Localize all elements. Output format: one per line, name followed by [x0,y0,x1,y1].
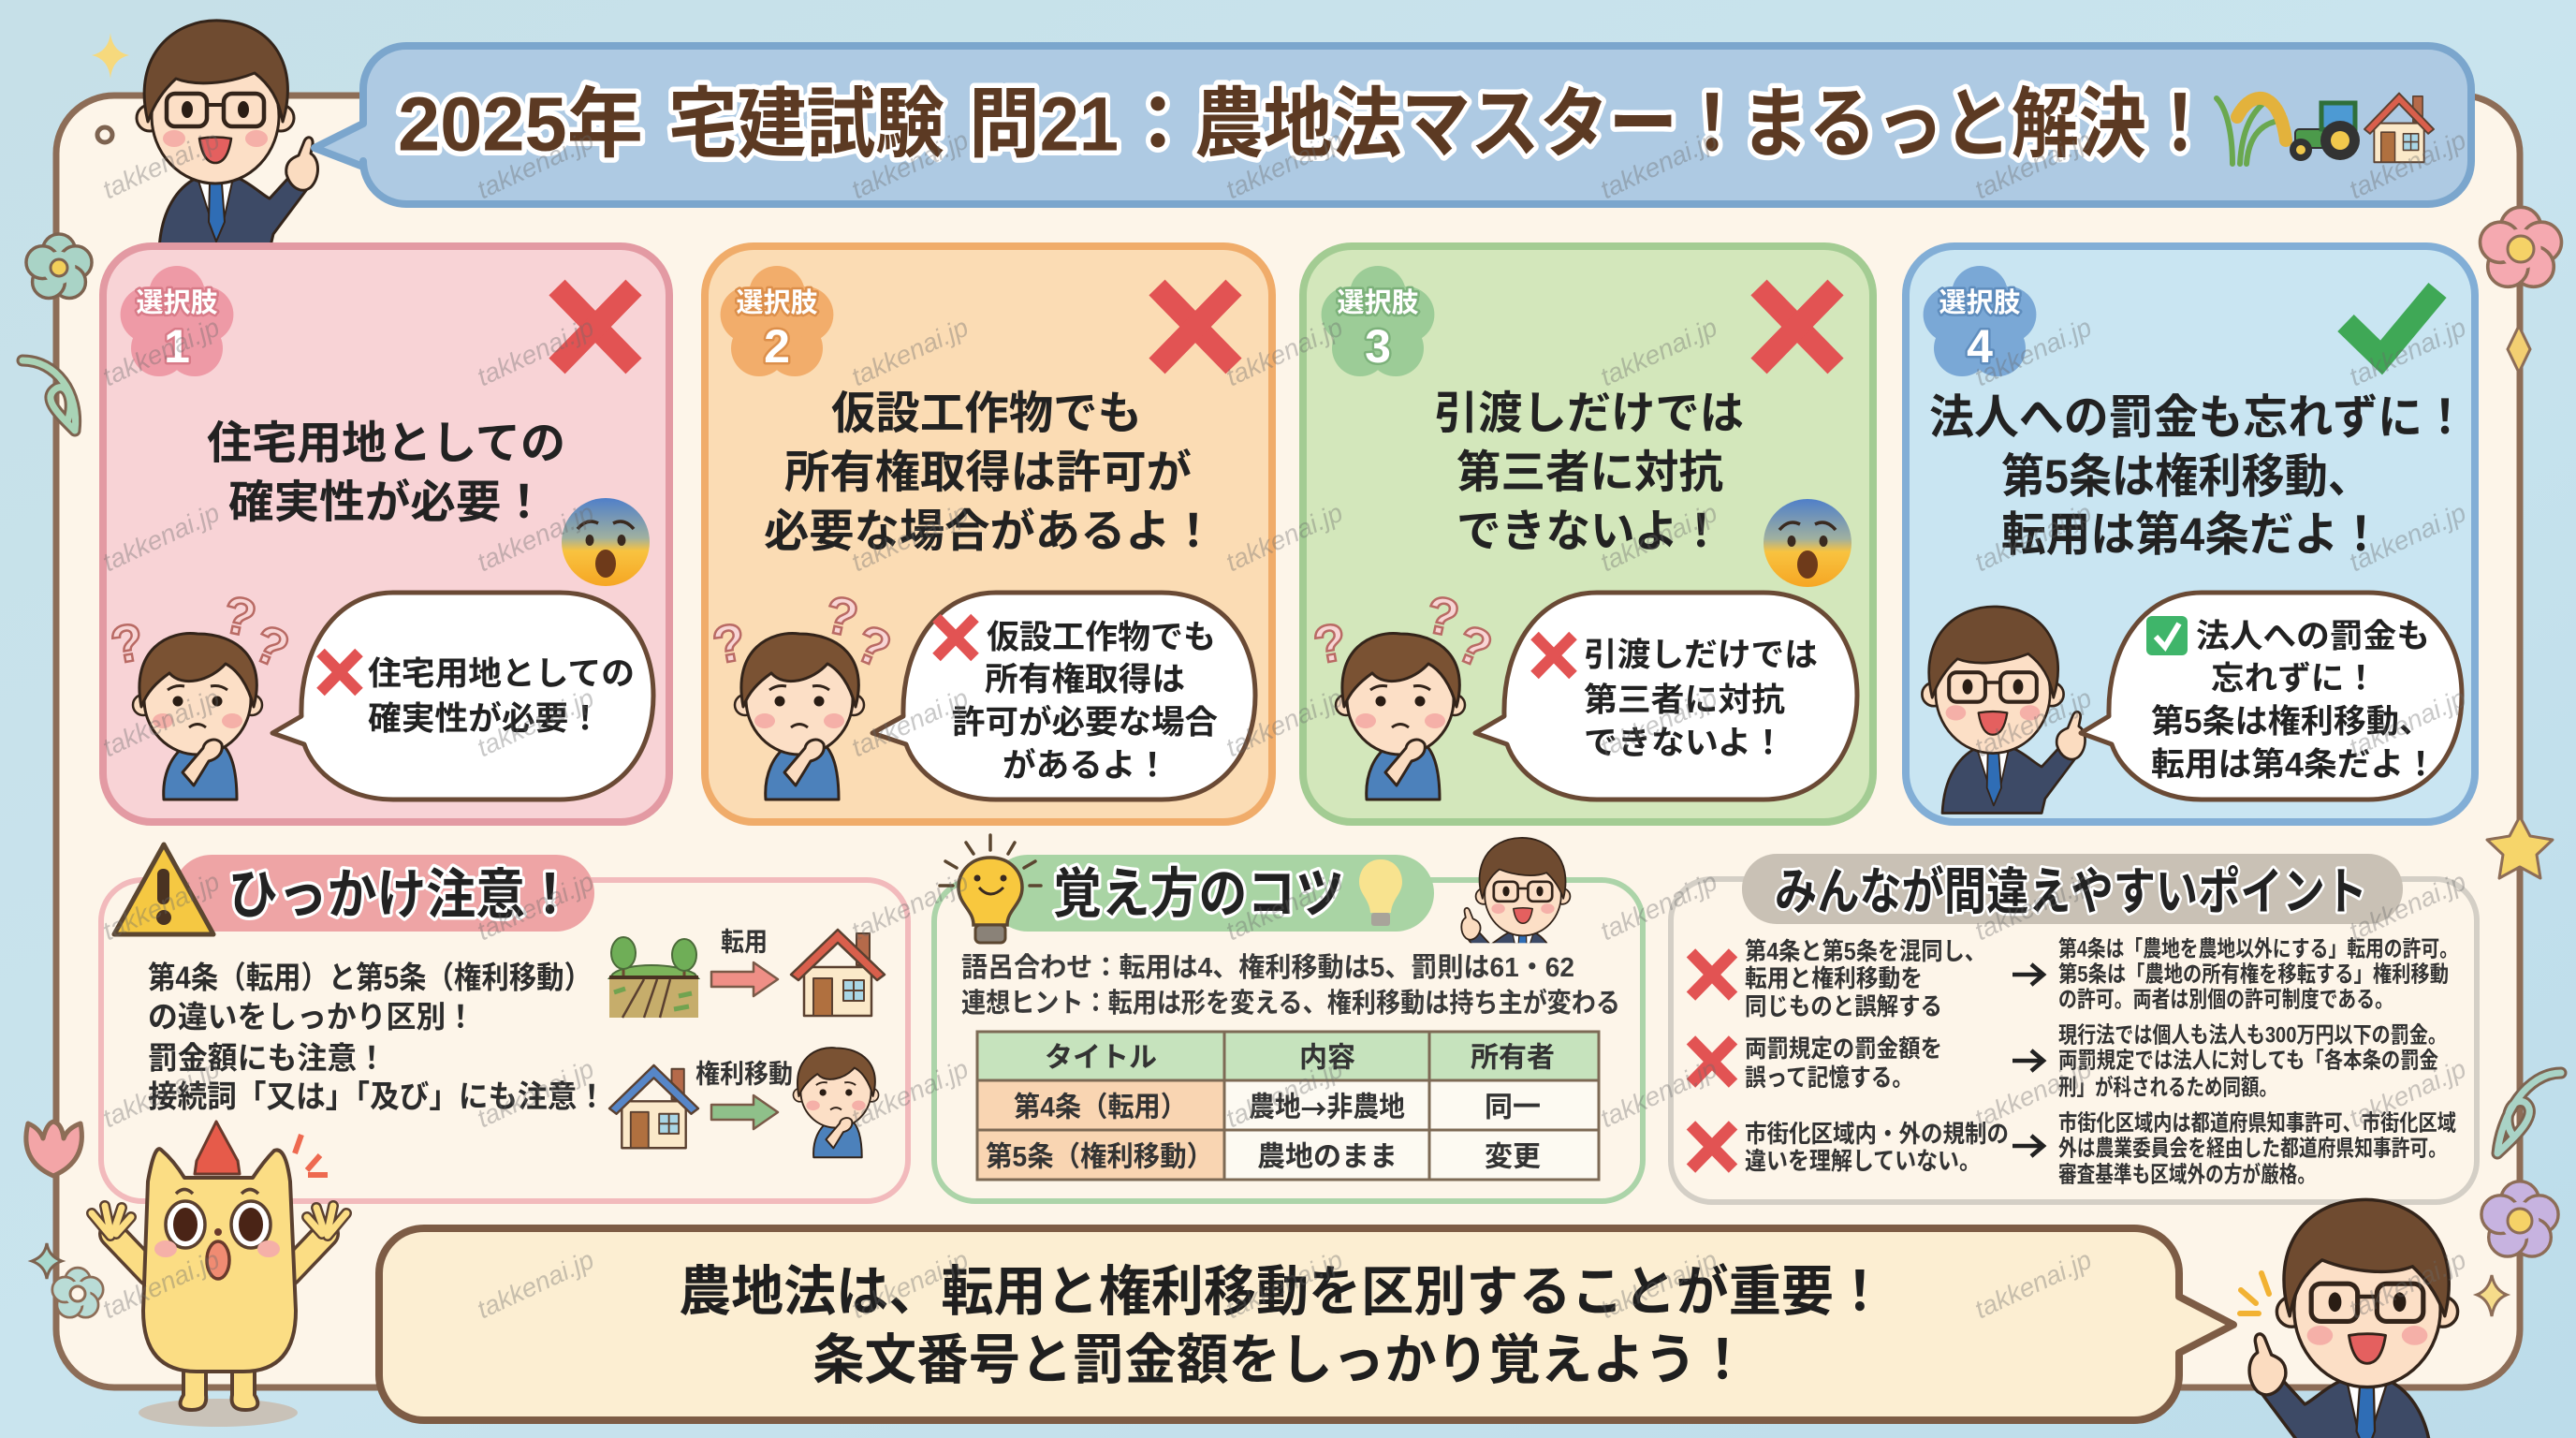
body text: 罰金額にも注意！ [148,1041,387,1075]
watermarks: takkenai.jp [1222,125,1347,204]
badge 2 [721,266,833,376]
comparison table: 農地→非農地 [1249,1087,1405,1128]
watermarks: takkenai.jp [473,125,598,204]
badge 2: 選択肢 [736,287,818,318]
mistake row 1 [1690,936,2458,1020]
character: confused boy [1310,584,1500,800]
watermarks: takkenai.jp [2345,125,2470,204]
title text: 宅建試験 [668,82,944,167]
watermarks [98,125,2470,1324]
summary text: 農地法は、転用と権利移動を区別することが重要！ [679,1262,1886,1322]
comparison table: 第4条（転用） [1014,1092,1187,1123]
icon: scared face [1764,499,1852,587]
badge 3: 選択肢 [1337,287,1419,318]
mistake row 1: 転用と権利移動を [1745,964,1923,992]
watermarks: takkenai.jp [2345,498,2470,577]
label: rights transfer: 権利移動 [695,1060,793,1088]
character: confused boy: ? [107,611,148,675]
main text: 住宅用地としての [207,419,565,468]
main text [1929,391,2467,561]
speech bubble: できないよ！ [1584,725,1785,762]
watermarks: takkenai.jp [2345,313,2470,391]
main text [207,419,565,528]
badge 3: 3 [1365,320,1391,373]
heading pill [173,855,594,932]
icon: scared face [562,498,650,586]
icon: warning triangle [114,844,213,934]
panel: choice 2 [705,246,1272,822]
watermarks: takkenai.jp [1970,125,2096,204]
comparison table: 変更 [1485,1142,1541,1172]
watermarks: takkenai.jp [2345,1245,2470,1324]
heading text: ひっかけ注意！ [228,865,575,925]
speech bubble: 転用は第4条だよ！ [2151,747,2437,783]
icon: bulb [1359,859,1402,926]
speech bubble [1475,593,1857,800]
heading text: 覚え方のコツ [1053,863,1344,925]
watermarks: takkenai.jp [1222,1054,1347,1133]
watermarks: takkenai.jp [473,313,598,391]
panel: trap warning [101,844,908,1201]
character: confused boy: ? [1421,584,1464,648]
mistake row 2: 両罰規定では法人に対しても「各本条の罰金 [2058,1047,2438,1073]
title text: ： [1120,82,1195,167]
icon: house [2364,94,2434,162]
arrow: green [711,1095,778,1129]
character: teacher [1460,837,1571,944]
character: confused boy: ? [709,611,750,675]
watermarks: takkenai.jp [847,1054,973,1133]
character: teacher [1922,607,2086,813]
comparison table: 農地のまま [1257,1142,1398,1172]
comparison table [977,1032,1599,1180]
watermarks: takkenai.jp [1970,498,2096,577]
watermarks: takkenai.jp [1970,313,2096,391]
mistake row 3: 市街化区域内は都道府県知事許可、市街化区域 [2058,1110,2456,1137]
badge 4: 4 [1967,320,1993,373]
watermarks: takkenai.jp [473,498,598,577]
mistake row 1: 同じものと誤解する [1745,992,1942,1020]
heading text: みんなが間違えやすいポイント [1775,864,2367,920]
mistake row 1: 第4条は「農地を農地以外にする」転用の許可。 [2058,936,2458,962]
watermarks: takkenai.jp [2345,683,2470,762]
icon: green check box [2146,616,2188,655]
panel: choice 1 [103,246,669,822]
main text: 仮設工作物でも [831,389,1142,438]
speech bubble: 第三者に対抗 [1584,682,1785,719]
title text: 農地法マスター！ [1194,82,1747,167]
summary text [679,1262,1886,1391]
arrow: red [711,962,778,996]
label: conversion: 転用 [721,927,768,957]
mistake row 2: 刑」が科されるため同額。 [2058,1075,2277,1101]
watermarks: takkenai.jp [98,867,224,946]
watermarks: takkenai.jp [1596,125,1721,204]
speech bubble: 第5条は権利移動、 [2151,704,2432,740]
speech bubble: 所有権取得は [985,661,1185,698]
watermarks: takkenai.jp [1596,683,1721,762]
watermarks: takkenai.jp [473,683,598,762]
speech bubble: 法人への罰金も [2196,618,2430,655]
watermarks: takkenai.jp [1596,313,1721,391]
character: confused boy: ? [245,612,298,680]
body text: 語呂合わせ：転用は4、権利移動は5、罰則は61・62 [961,952,1574,983]
badge 4: 選択肢 [1939,287,2021,318]
watermarks: takkenai.jp [473,867,598,946]
body text [148,961,607,1114]
watermarks: takkenai.jp [847,313,973,391]
watermarks: takkenai.jp [1222,683,1347,762]
watermarks: takkenai.jp [473,1054,598,1133]
mistake row 2: 誤って記憶する。 [1745,1064,1913,1092]
badge 1: 1 [164,320,190,373]
main text: 法人への罰金も忘れずに！ [1929,391,2467,444]
mistake row 3 [1690,1110,2456,1187]
watermarks: takkenai.jp [1970,867,2096,946]
title banner [315,46,2471,204]
watermarks: takkenai.jp [1596,498,1721,577]
badge 1: 選択肢 [136,287,218,318]
watermarks: takkenai.jp [473,1245,598,1324]
cross mark [557,287,634,366]
character: confused boy: ? [218,584,261,648]
panel: memory tips [934,835,1643,1201]
badge 3 [1322,266,1434,376]
speech bubble: 引渡しだけでは [1584,637,1818,674]
summary speech panel [379,1228,2233,1420]
main text: 引渡しだけでは [1434,389,1744,438]
title text: まるっと解決！ [1741,82,2214,167]
comparison table: タイトル [1045,1043,1157,1073]
cross mark [1759,287,1836,366]
character: teacher top left [137,21,318,250]
speech bubble [872,593,1255,800]
main text: 所有権取得は許可が [784,448,1192,498]
speech bubble: 許可が必要な場合 [952,704,1218,741]
watermarks: takkenai.jp [1222,313,1347,391]
speech bubble [2081,593,2462,800]
main text [1434,389,1744,556]
mistake row 2: 現行法では個人も法人も300万円以下の罰金。 [2058,1022,2447,1049]
icon: tractor [2290,103,2360,161]
panel: common mistakes [1671,854,2477,1202]
panel: choice 3 [1303,246,1873,822]
watermarks: takkenai.jp [847,867,973,946]
mistake row 3: 外は農業委員会を経由した都道府県知事許可。 [2058,1137,2447,1161]
title text: 問21 [969,82,1119,167]
icon: rice plant [2217,98,2286,164]
emphasis lines [2240,1273,2269,1313]
speech bubble: 忘れずに！ [2211,661,2378,697]
character: confused boy: ? [847,612,900,680]
character: confused boy: ? [1448,612,1500,680]
comparison table: 第5条（権利移動） [986,1142,1213,1172]
watermarks: takkenai.jp [2345,867,2470,946]
speech bubble: 仮設工作物でも [987,620,1216,655]
mistake row 2 [1690,1022,2447,1101]
character: teacher bottom right [2249,1199,2458,1438]
heading pill [1742,854,2403,924]
mistake row 3: 違いを理解していない。 [1745,1147,1981,1175]
watermarks: takkenai.jp [98,1245,224,1324]
watermarks: takkenai.jp [98,313,224,391]
watermarks: takkenai.jp [847,125,973,204]
watermarks: takkenai.jp [847,498,973,577]
watermarks: takkenai.jp [847,683,973,762]
watermarks: takkenai.jp [1970,683,2096,762]
main text: できないよ！ [1456,507,1723,556]
watermarks: takkenai.jp [98,683,224,762]
watermarks: takkenai.jp [1596,867,1721,946]
icon: blue-roof house [609,1065,698,1148]
watermarks: takkenai.jp [1970,1054,2096,1133]
icon: red-roof house [791,930,885,1016]
watermarks: takkenai.jp [98,125,224,204]
main text: 第三者に対抗 [1456,448,1723,498]
mistake row 3: 市街化区域内・外の規制の [1745,1120,2009,1148]
character: confused boy: ? [820,584,863,648]
watermarks: takkenai.jp [1596,1054,1721,1133]
check mark [2346,290,2437,358]
icon: farmland [609,937,698,1018]
title text: 2025年 [398,82,643,167]
title text [398,82,2214,167]
mistake row 1: の許可。両者は別個の許可制度である。 [2058,987,2393,1013]
watermarks: takkenai.jp [1596,1245,1721,1324]
body text: 第4条（転用）と第5条（権利移動） [148,961,592,994]
mistake row 2: 両罰規定の罰金額を [1745,1034,1942,1063]
watermarks: takkenai.jp [98,498,224,577]
watermarks: takkenai.jp [1222,498,1347,577]
body text: 接続詞「又は」「及び」にも注意！ [148,1078,607,1114]
mistake row 1: 第4条と第5条を混同し、 [1745,937,1986,965]
character: worried boy [793,1048,879,1157]
speech bubble: 確実性が必要！ [368,700,602,738]
watermarks: takkenai.jp [2345,1054,2470,1133]
main text: 転用は第4条だよ！ [2001,508,2383,561]
comparison table: 同一 [1485,1092,1541,1123]
body text: の違いをしっかり区別！ [148,1000,476,1034]
speech bubble: 住宅用地としての [368,655,635,693]
main text: 第5条は権利移動、 [2001,450,2371,503]
heading pill [989,855,1434,932]
character: confused boy: ? [1310,611,1351,675]
speech bubble: があるよ！ [1003,747,1169,785]
main text [764,389,1216,556]
badge 2: 2 [764,320,790,373]
watermarks: takkenai.jp [847,1245,973,1324]
speech bubble [272,593,653,800]
badge 1 [121,266,233,376]
body text: 連想ヒント：転用は形を変える、権利移動は持ち主が変わる [961,987,1620,1019]
character: cat mascot [92,1122,346,1427]
character: confused boy [107,584,298,800]
comparison table: 所有者 [1471,1043,1555,1073]
icon: smiling bulb [940,835,1041,943]
main text: 必要な場合があるよ！ [764,507,1216,556]
watermarks: takkenai.jp [1222,867,1347,946]
body text [961,952,1620,1019]
character: confused boy [709,584,900,800]
watermarks: takkenai.jp [98,1054,224,1133]
mistake row 3: 審査基準も区域外の方が厳格。 [2058,1161,2316,1187]
badge 4 [1924,266,2036,376]
watermarks: takkenai.jp [1970,1245,2096,1324]
cross mark [1157,287,1234,366]
panel: choice 4 [1906,246,2475,822]
mistake row 1: 第5条は「農地の所有権を移転する」権利移動 [2058,962,2449,987]
watermarks: takkenai.jp [1222,1245,1347,1324]
comparison table: 内容 [1299,1043,1355,1073]
summary text: 条文番号と罰金額をしっかり覚えよう！ [812,1329,1749,1391]
main text: 確実性が必要！ [228,477,547,528]
